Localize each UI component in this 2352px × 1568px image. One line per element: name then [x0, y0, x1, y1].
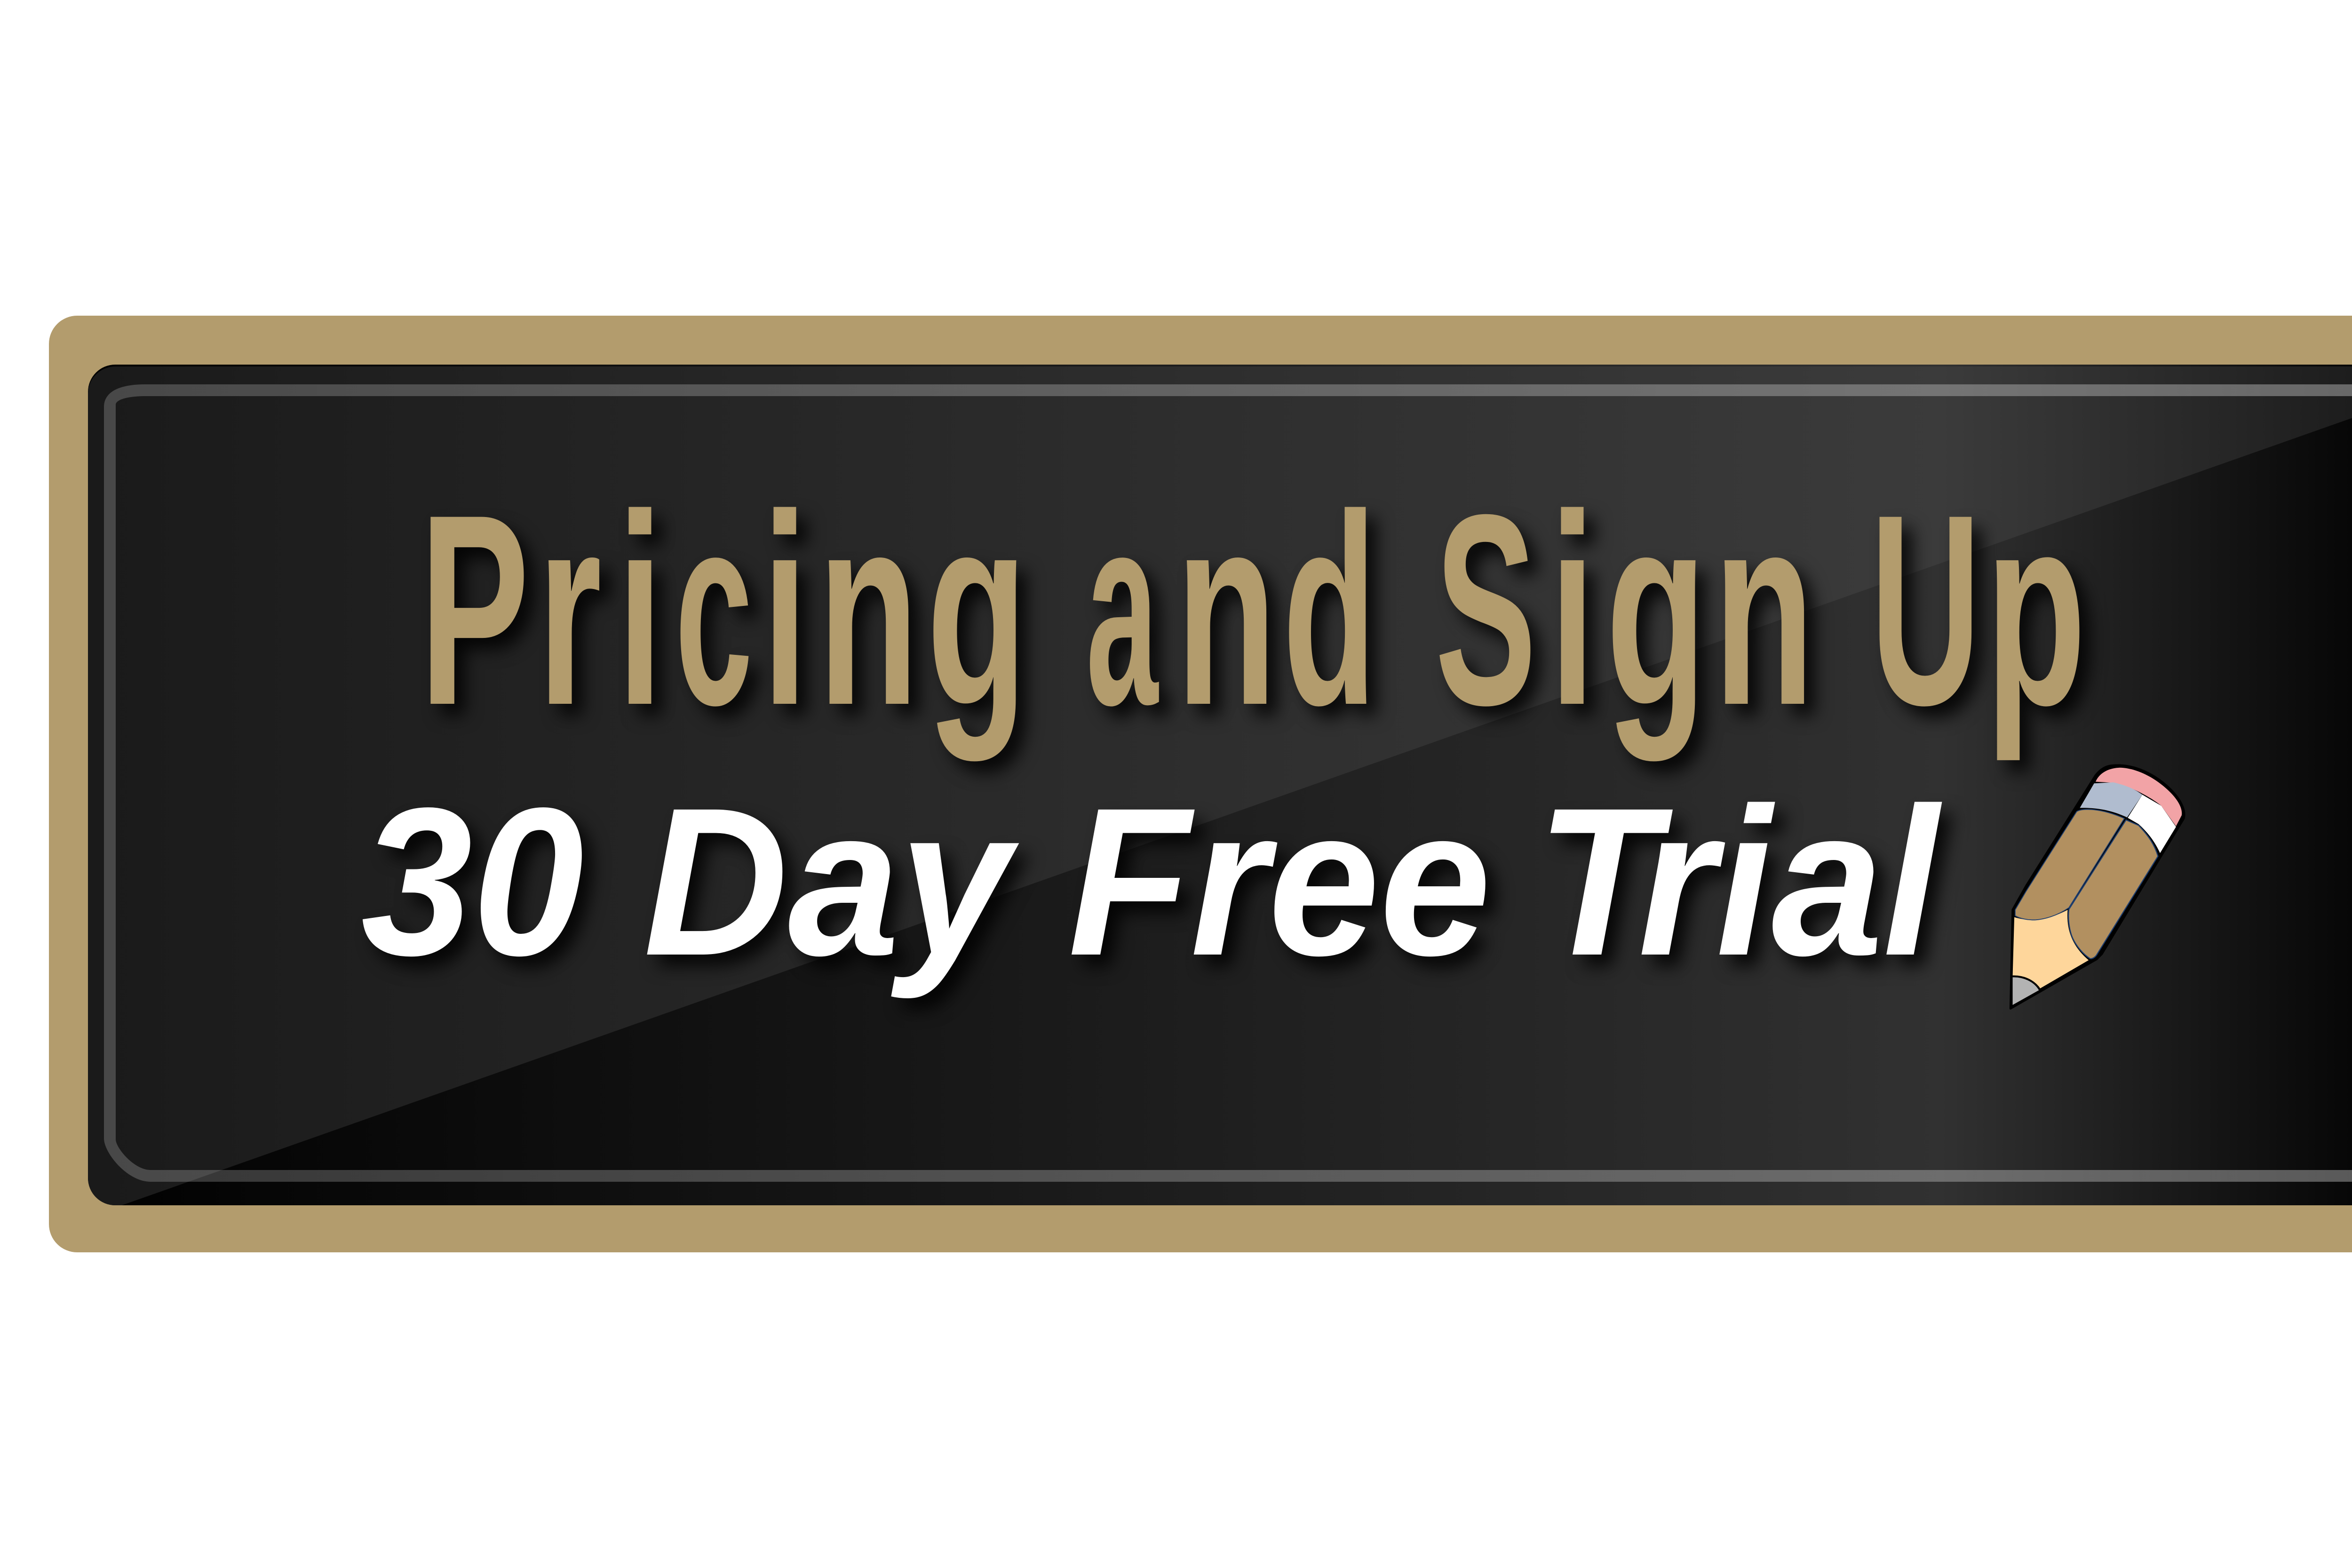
barrel left facet [2015, 809, 2124, 920]
graphite edge [2013, 976, 2040, 990]
subheading: 30 Day Free Trial: T [1536, 764, 1674, 999]
banner graphic [49, 316, 2352, 1252]
heading: Pricing and Sign Up [420, 459, 2086, 763]
pencil outline [2010, 765, 2184, 1009]
heading: Pricing and Sign Up: ing [762, 459, 1081, 763]
heading: Pricing and Sign Up: d [1283, 459, 1376, 762]
barrel right facet [2068, 820, 2158, 959]
panel: gold outer frame [49, 316, 2352, 1252]
subheading: 30 Day Free Trial [361, 764, 1942, 1001]
heading: Pricing and Sign Up: Pri [420, 459, 663, 762]
wood tip [2013, 910, 2089, 988]
ferrule shaded [2080, 782, 2142, 817]
inner bevel ring [104, 384, 2352, 1182]
icon: pencil [2010, 765, 2184, 1009]
heading: Pricing and Sign Up: S [1435, 459, 1536, 762]
panel: dark inner plate [71, 348, 2352, 1223]
ferrule highlight [2128, 795, 2176, 853]
glossy highlight [71, 348, 2352, 1223]
heading: Pricing and Sign Up: n [1176, 459, 1277, 762]
subheading: 30 Day Free Trial: rial [1638, 764, 1942, 999]
subheading: 30 Day Free Trial: 30 [361, 764, 584, 999]
subheading: 30 Day Free Trial: Free [1068, 764, 1491, 999]
heading: Pricing and Sign Up: c [675, 459, 753, 762]
heading: Pricing and Sign Up: p [1986, 459, 2086, 763]
subheading: 30 Day Free Trial: Day [644, 764, 1021, 1001]
heading: Pricing and Sign Up: a [1086, 459, 1159, 762]
graphite point [2013, 977, 2039, 1005]
heading: Pricing and Sign Up: ign [1549, 459, 1857, 763]
heading: Pricing and Sign Up: U [1870, 459, 1981, 762]
eraser [2096, 768, 2182, 826]
